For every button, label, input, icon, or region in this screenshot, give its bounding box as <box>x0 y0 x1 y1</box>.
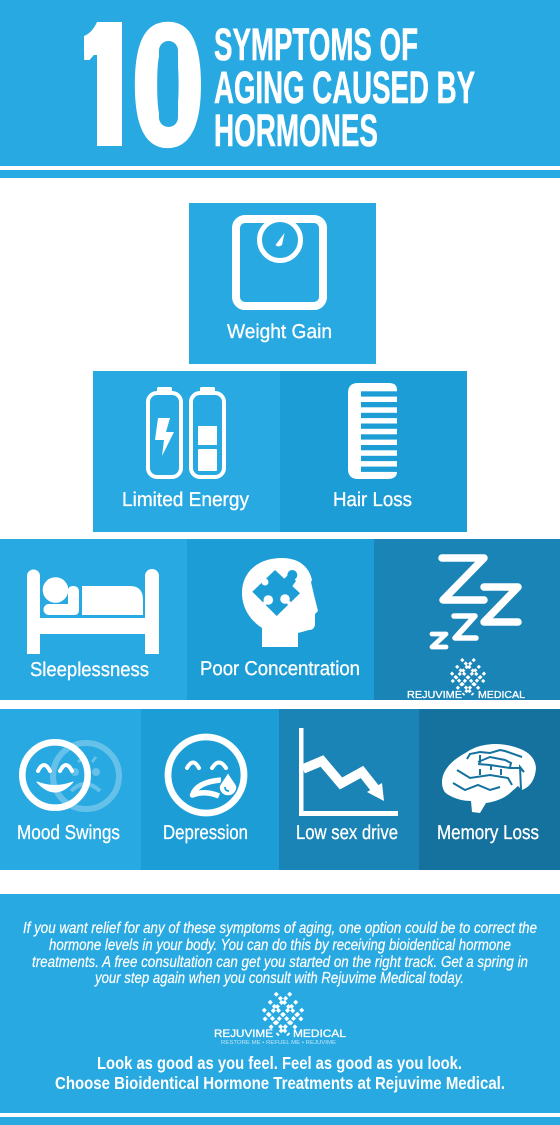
icon: batteries <box>148 387 224 477</box>
panel: memory loss <box>419 709 560 870</box>
icon: brain <box>442 744 536 813</box>
logo: rejuvime medical: RESTORE ME • REFUEL ME • REJUVIME <box>221 1040 337 1046</box>
panel: limited energy <box>93 371 280 532</box>
icon: sleep letters <box>432 558 518 647</box>
icon: crying face <box>168 737 244 813</box>
icon: bathroom scale <box>236 219 323 306</box>
closing statement <box>55 1053 505 1093</box>
icon: happy face <box>22 742 88 808</box>
label: Mood Swings <box>17 822 120 844</box>
icon: head with puzzle piece <box>242 558 318 647</box>
logo: rejuvime medical: REJUVIME <box>214 1028 273 1040</box>
header <box>0 0 560 183</box>
panel: depression <box>141 709 279 870</box>
label: Memory Loss <box>437 822 539 844</box>
panel: hair loss <box>280 371 467 532</box>
logo: rejuvime medical <box>214 993 346 1046</box>
closing statement: Look as good as you feel. Feel as good as you look. <box>97 1053 462 1073</box>
icon: comb <box>348 383 399 479</box>
icon: falling line chart <box>299 728 398 816</box>
panel: weight gain <box>189 203 376 364</box>
panel: mood swings <box>0 709 141 870</box>
logo: rejuvime medical: REJUVIME <box>407 689 462 701</box>
label: Sleeplessness <box>30 659 149 681</box>
panel: sleeplessness <box>0 539 187 700</box>
logo: rejuvime medical: MEDICAL <box>293 1028 346 1040</box>
title: HORMONES <box>214 105 378 156</box>
label: Weight Gain <box>227 321 332 343</box>
label: Limited Energy <box>122 489 249 511</box>
panel: low sex drive <box>279 709 419 870</box>
title: SYMPTOMS OF <box>214 19 418 70</box>
body text: your step again when you consult with Rejuvime Medical today. <box>94 970 464 987</box>
label: Poor Concentration <box>200 658 360 680</box>
label: Hair Loss <box>333 489 412 511</box>
logo: rejuvime medical <box>407 659 525 701</box>
label: Depression <box>163 822 248 844</box>
icon: bed <box>27 569 159 654</box>
logo: rejuvime medical: MEDICAL <box>478 689 525 701</box>
label: Low sex drive <box>296 822 398 844</box>
icon: faded sad face <box>53 743 119 809</box>
body text <box>23 920 537 987</box>
big number 10 <box>60 0 204 183</box>
footer panel <box>0 894 560 1125</box>
panel: zzz and logo <box>374 539 560 701</box>
title <box>214 19 475 156</box>
panel: poor concentration <box>187 539 374 700</box>
